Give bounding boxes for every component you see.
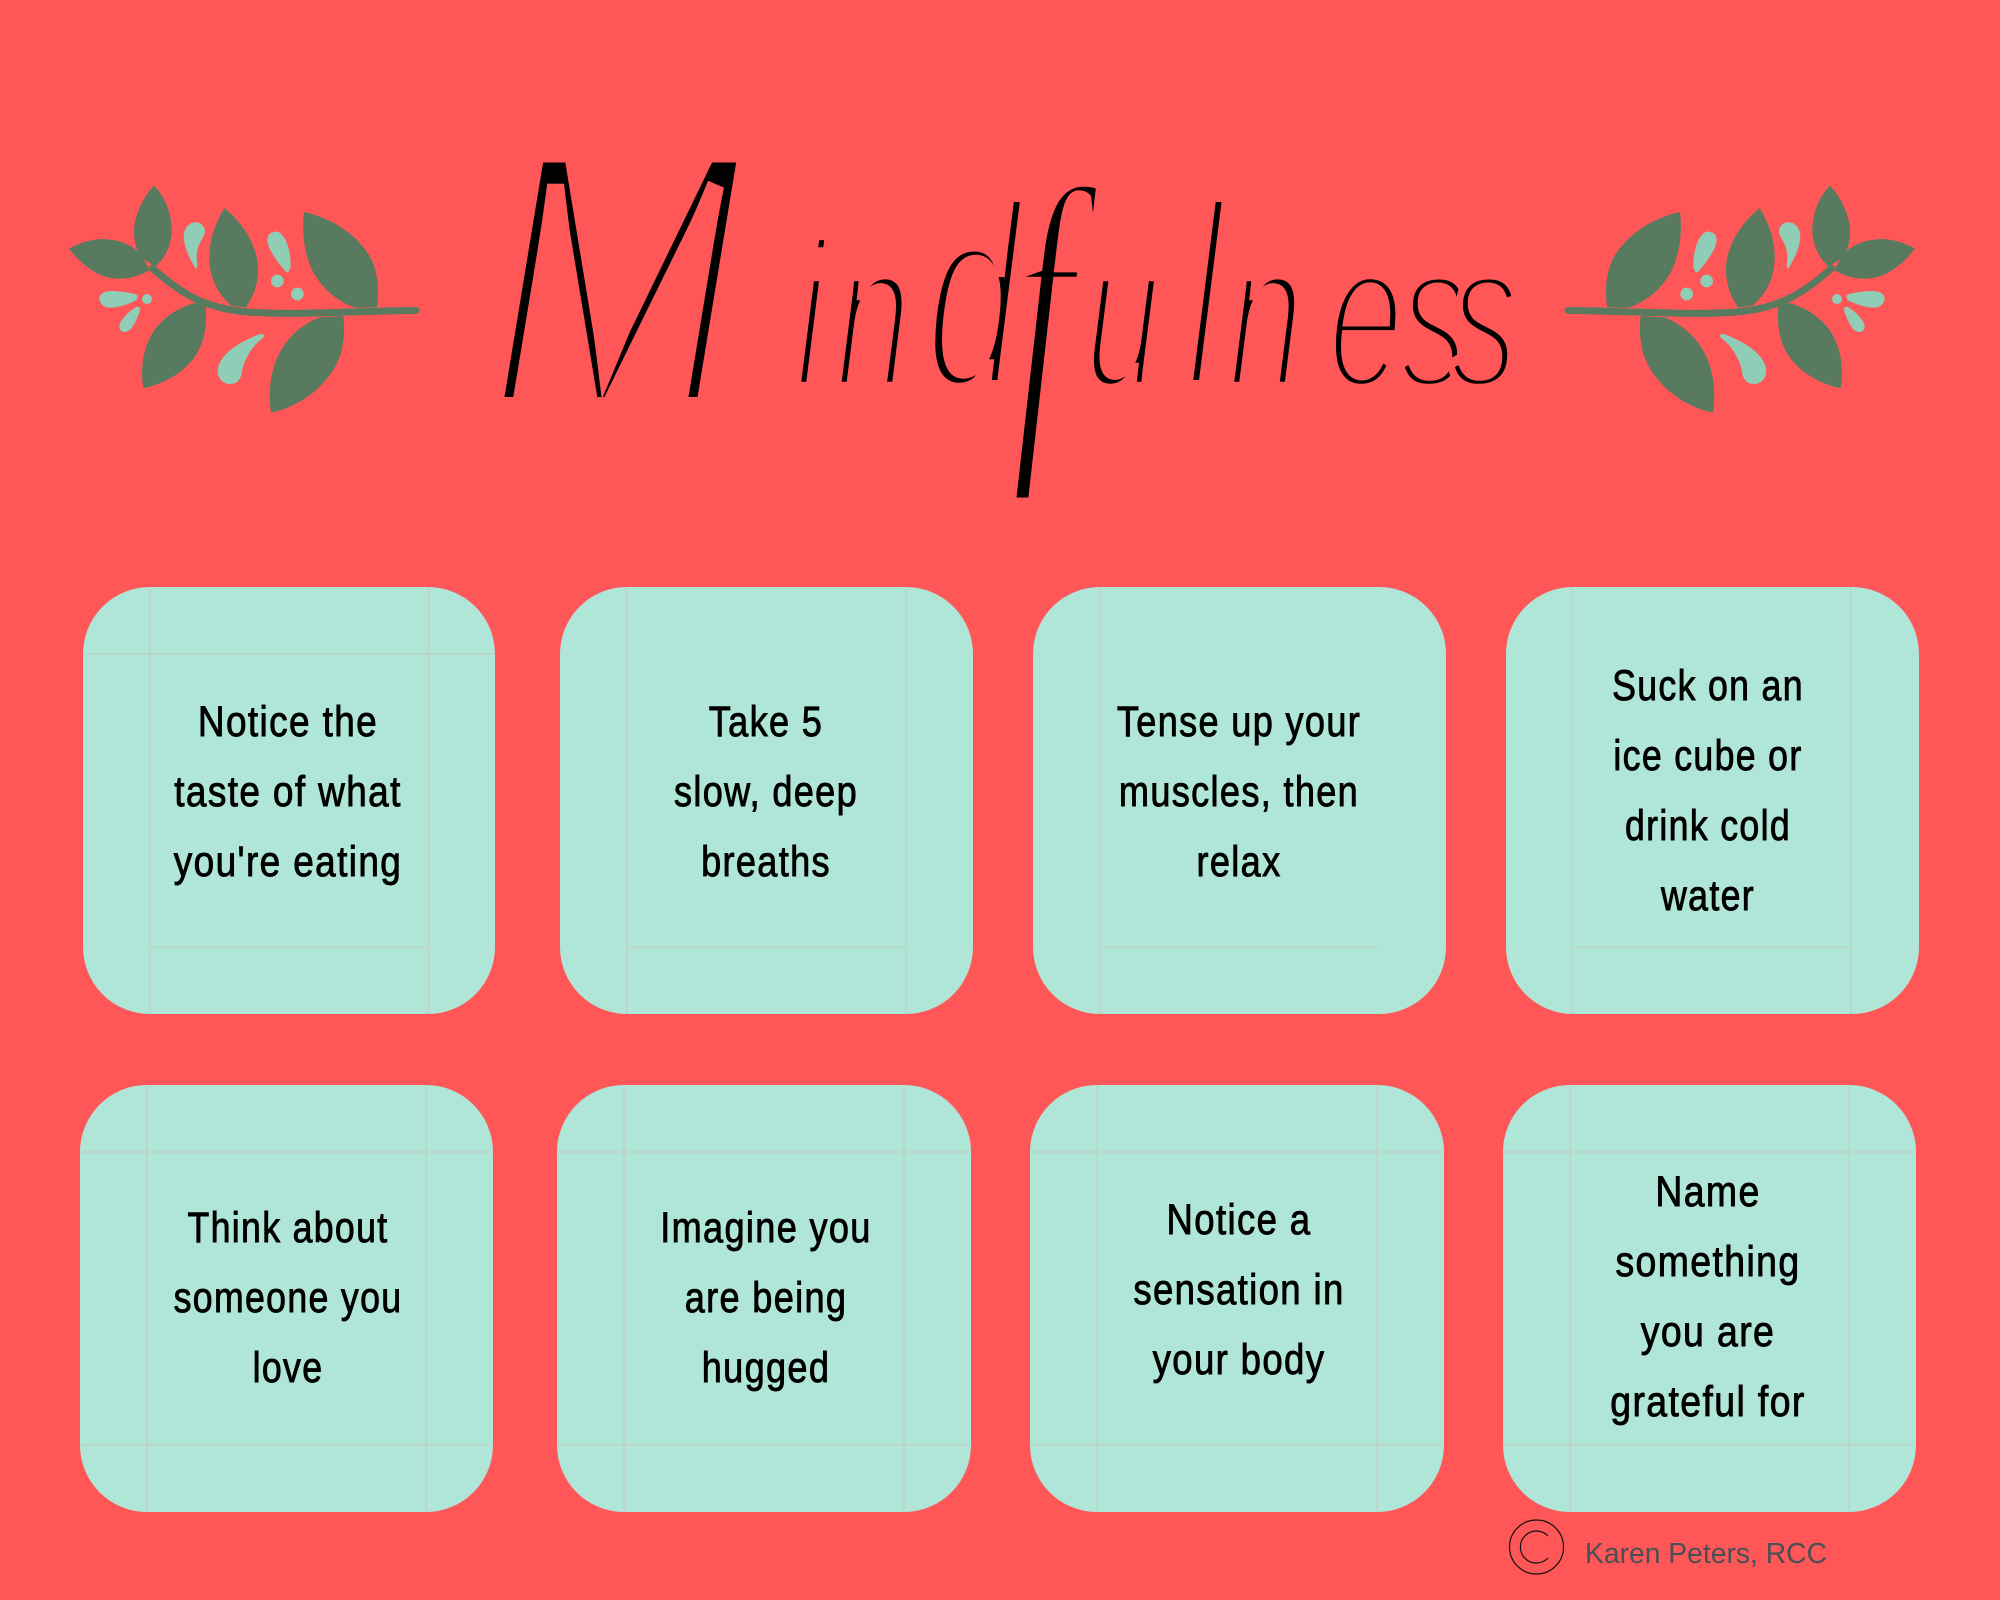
text: tense muscles: muscles, then <box>1119 768 1359 816</box>
text: grateful: something <box>1615 1238 1801 1286</box>
text: body sensation: sensation in <box>1133 1266 1345 1314</box>
text: body sensation: your body <box>1153 1336 1325 1384</box>
text: tense muscles: Tense up your <box>1117 698 1361 746</box>
icon: copyright symbol <box>1510 1520 1564 1574</box>
title: d <box>925 149 1026 444</box>
text: grateful: Name <box>1655 1168 1761 1216</box>
panel: card 2 <box>560 587 973 1014</box>
title: s <box>1400 197 1468 432</box>
panel: card 8 <box>1503 1085 1916 1512</box>
text: someone you love: love <box>253 1344 323 1392</box>
text: someone you love: Think about <box>187 1204 389 1252</box>
text: being hugged: are being <box>685 1274 847 1322</box>
text: slow breaths: slow, deep <box>674 768 858 816</box>
title: n <box>835 197 911 432</box>
text: body sensation: Notice a <box>1167 1196 1311 1244</box>
title: M <box>485 72 750 486</box>
icon: left leafy branch <box>69 186 416 413</box>
title: l <box>1185 149 1227 444</box>
panel: card 5 <box>80 1085 493 1512</box>
title: f <box>1010 116 1103 505</box>
text: notice taste: taste of what <box>174 768 402 816</box>
text: slow breaths: breaths <box>701 838 831 886</box>
text: tense muscles: relax <box>1197 838 1281 886</box>
panel: card 4 <box>1506 587 1919 1014</box>
text: grateful: you are <box>1641 1308 1775 1356</box>
panel: card 6 <box>557 1085 971 1512</box>
text: ice cube: drink cold <box>1625 802 1791 850</box>
title <box>484 72 1518 505</box>
text: being hugged: hugged <box>702 1344 830 1392</box>
text: ice cube: ice cube or <box>1613 732 1803 780</box>
text: notice taste: Notice the <box>198 698 378 746</box>
icon: right leafy branch <box>1568 186 1915 413</box>
title: i <box>795 197 829 432</box>
footer credit: Karen Peters, RCC <box>1585 1538 1827 1570</box>
title: n <box>1228 197 1304 432</box>
title: e <box>1328 197 1404 432</box>
text: slow breaths: Take 5 <box>709 698 823 746</box>
text: being hugged: Imagine you <box>660 1204 872 1252</box>
text: someone you love: someone you <box>174 1274 402 1322</box>
text: grateful: grateful for <box>1610 1378 1806 1426</box>
text: ice cube: water <box>1660 872 1755 920</box>
panel: card 7 <box>1030 1085 1444 1512</box>
title: s <box>1450 197 1518 432</box>
text: notice taste: you're eating <box>174 838 402 886</box>
text: ice cube: Suck on an <box>1612 662 1804 710</box>
panel: card 1 <box>83 587 495 1014</box>
title: u <box>1085 197 1161 432</box>
panel: card 3 <box>1033 587 1446 1014</box>
